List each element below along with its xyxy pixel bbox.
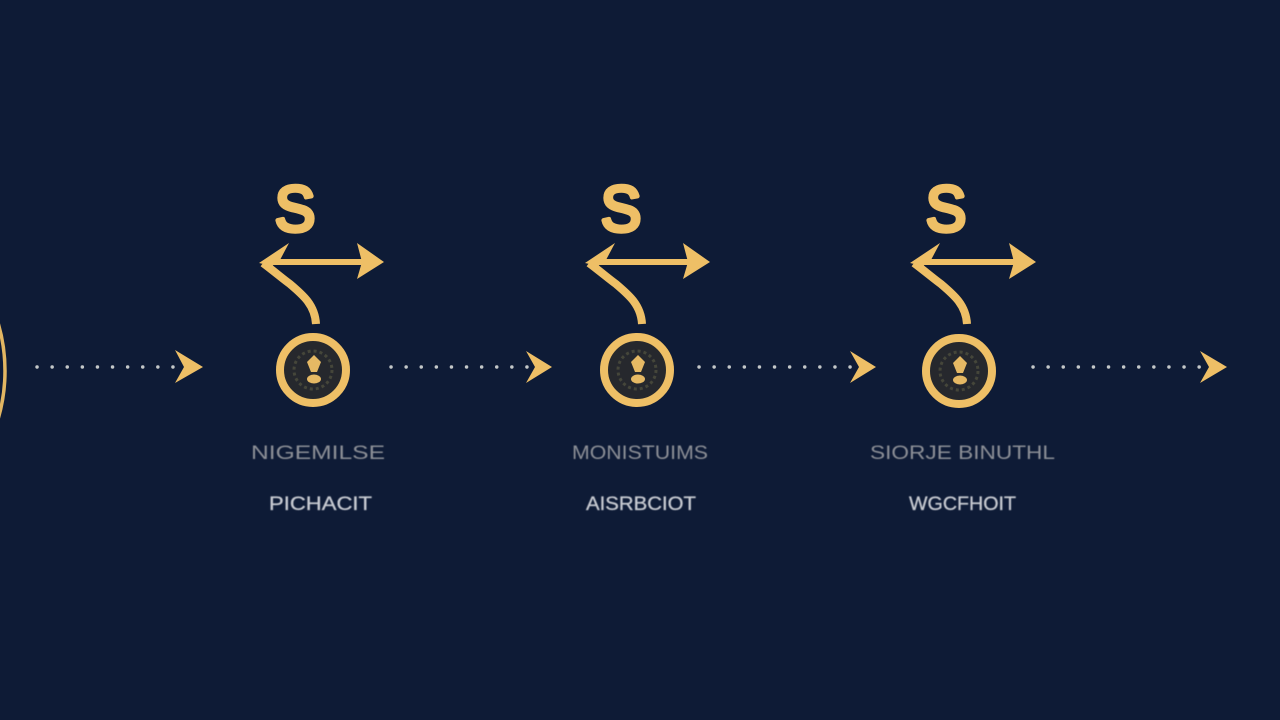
arrow: dotted connector 4 [1033, 351, 1227, 383]
icon: branching double arrow [910, 243, 1036, 324]
label: step 2 subtitle: AISRBCIOT [586, 494, 696, 515]
partial circle at left edge [0, 201, 5, 541]
label: step 2 title: MONISTUIMS [572, 443, 708, 464]
step 3 [870, 174, 1055, 515]
arrow: dotted connector 1 [37, 350, 203, 383]
arrow: dotted connector 3 [699, 351, 876, 383]
icon: branching double arrow [259, 243, 384, 324]
icon: branching double arrow [585, 243, 710, 324]
icon: gold coin [926, 338, 992, 404]
label: step 3 title: SIORJE BINUTHL [870, 443, 1055, 464]
icon: gold coin [604, 337, 670, 403]
icon: S symbol: S [275, 174, 315, 245]
icon: gold coin [280, 337, 346, 403]
label: step 1 subtitle: PICHACIT [269, 494, 372, 515]
step 2 [572, 174, 710, 515]
arrow: dotted connector 2 [391, 351, 552, 383]
icon: S symbol: S [601, 174, 641, 245]
label: step 1 title: NIGEMILSE [251, 443, 385, 464]
label: step 3 subtitle: WGCFHOIT [909, 494, 1016, 515]
icon: S symbol: S [926, 174, 966, 245]
step 1 [251, 174, 385, 515]
